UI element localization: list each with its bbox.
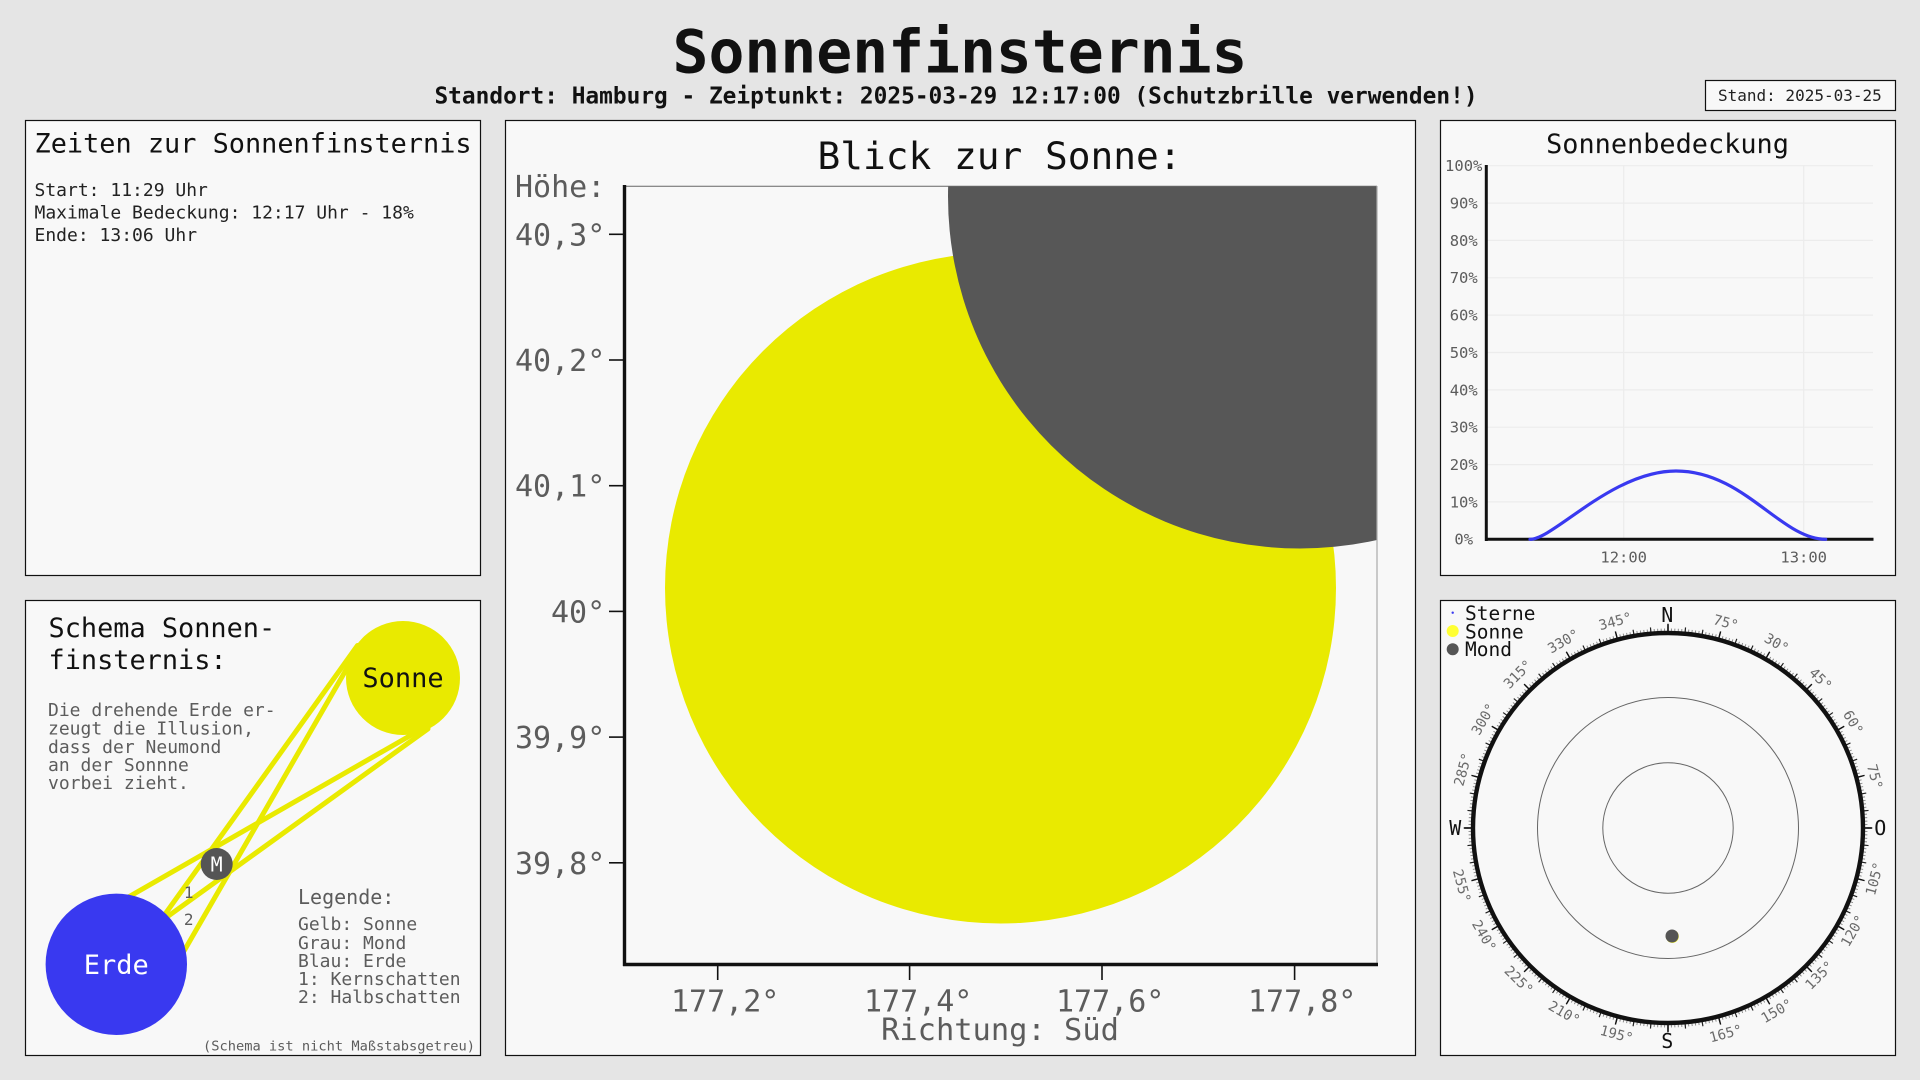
text block: explanation: zeugt die Illusion, [48,718,254,740]
icon: moon [201,848,233,880]
text block: times [34,180,414,246]
cardinal directions [1449,603,1886,1053]
date stamp: Stand: 2025-03-25 [1718,86,1882,105]
cardinal directions: O [1874,816,1886,840]
y axis labels: 70% [1450,269,1478,287]
text block: explanation: vorbei zieht. [48,773,189,794]
chart: compass ring [1468,628,1868,1028]
degree labels: 105° [1863,861,1887,897]
text block: explanation [48,700,276,794]
legend: Blau: Erde [298,951,406,972]
degree labels: 75° [1863,763,1885,791]
legend: 2: Halbschatten [298,987,461,1008]
marker: sun and moon position [1666,930,1679,943]
y axis labels: 30% [1450,419,1478,437]
heading: times: Zeiten zur Sonnenfinsternis [34,129,472,160]
panel: eclipse times [26,120,480,576]
legend: Grau: Mond [298,933,406,954]
degree labels: 60° [1839,708,1866,738]
y axis: Höhe: [515,170,605,205]
text block: explanation: an der Sonnne [48,755,189,776]
y axis labels: 40% [1450,381,1478,399]
degree labels: 330° [1545,627,1582,657]
legend: sky objects: Sonne [1465,620,1524,643]
icon: earth [46,894,187,1035]
degree labels: 345° [1597,610,1634,634]
heading: schema [48,613,275,676]
degree labels: 315° [1501,657,1536,692]
legend: sky objects: Mond [1465,638,1512,661]
y axis labels: 50% [1450,344,1478,362]
degree labels: 30° [1761,631,1791,657]
legend: Legende: [298,885,394,909]
x axis: 177,8° [1248,984,1356,1020]
panel: view to the sun [504,120,1416,1056]
heading: schema: Schema Sonnen- [48,613,275,644]
text block: times: Start: 11:29 Uhr [34,180,208,201]
legend: 1: Kernschatten [298,969,461,990]
degree labels: 75° [1711,612,1740,634]
cardinal directions: N [1661,603,1673,627]
y axis labels: 0% [1454,531,1474,549]
date stamp [1706,80,1896,110]
y axis labels [1445,157,1483,549]
icon: earth: Erde [84,950,149,981]
legend: Gelb: Sonne [298,914,417,935]
y axis labels: 100% [1445,157,1483,175]
x axis: 177,4° [864,984,972,1020]
title: Sonnenfinsternis [673,18,1247,88]
x axis labels: 12:00 [1600,549,1647,567]
degree labels: 135° [1802,958,1838,993]
y axis [515,170,624,966]
degree labels: 195° [1598,1023,1635,1047]
label: penumbra: 2 [184,910,194,929]
text block: explanation: dass der Neumond [48,737,221,758]
degree labels: 165° [1708,1022,1744,1046]
y axis labels: 80% [1450,232,1478,250]
degree labels: 300° [1469,701,1500,738]
text block: times: Maximale Bedeckung: 12:17 Uhr - 18% [34,202,414,224]
x axis: 177,2° [671,984,779,1020]
legend: sky objects [1447,602,1535,661]
cardinal directions: S [1661,1029,1673,1053]
x axis: 177,6° [1056,984,1164,1020]
heading: coverage: Sonnenbedeckung [1546,129,1789,160]
y axis labels: 90% [1450,194,1478,212]
y axis: 39,8° [515,847,605,882]
y axis: 40,2° [515,344,605,379]
icon: sun [346,621,460,735]
label: umbra: 1 [184,883,194,902]
x axis: Richtung: Süd [881,1013,1119,1048]
y axis: 40° [551,595,605,630]
footnote: (Schema ist nicht Maßstabsgetreu) [203,1038,475,1054]
degree labels: 210° [1545,998,1582,1029]
x axis labels [1600,549,1827,567]
legend: sky objects: Sterne [1465,602,1535,625]
heading: view: Blick zur Sonne: [817,134,1182,178]
y axis labels: 10% [1450,493,1478,511]
y axis: 39,9° [515,721,605,756]
degree labels: 285° [1452,751,1476,788]
cardinal directions: W [1449,816,1462,840]
degree labels: 45° [1805,665,1835,694]
shadow lines [125,646,428,958]
panel: sky compass [1440,600,1896,1056]
line chart: coverage over time [1445,157,1874,567]
chart: sun and moon discs [626,186,1378,963]
degree labels: 255° [1449,868,1473,904]
icon: sun: Sonne [362,663,444,694]
heading: schema: finsternis: [48,645,227,676]
y axis: 40,1° [515,470,605,505]
y axis: 40,3° [515,218,605,254]
text block: times: Ende: 13:06 Uhr [34,225,197,246]
panel: coverage chart [1440,120,1896,576]
text block: explanation: Die drehende Erde er- [48,700,276,721]
panel: eclipse schema [26,600,480,1056]
degree labels: 240° [1468,918,1499,955]
degree labels: 120° [1838,913,1869,950]
degree labels: 150° [1759,996,1796,1027]
degree labels [1449,610,1887,1047]
legend [298,885,461,1008]
y axis labels: 60% [1450,306,1478,324]
x axis [623,964,1378,1048]
x axis labels: 13:00 [1780,549,1827,567]
subtitle: Standort: Hamburg - Zeiptunkt: 2025-03-29 12:17:00 (Schutzbrille verwenden!) [434,84,1478,110]
y axis labels: 20% [1450,456,1478,474]
degree labels: 225° [1501,963,1536,998]
icon: moon: M [211,852,223,876]
